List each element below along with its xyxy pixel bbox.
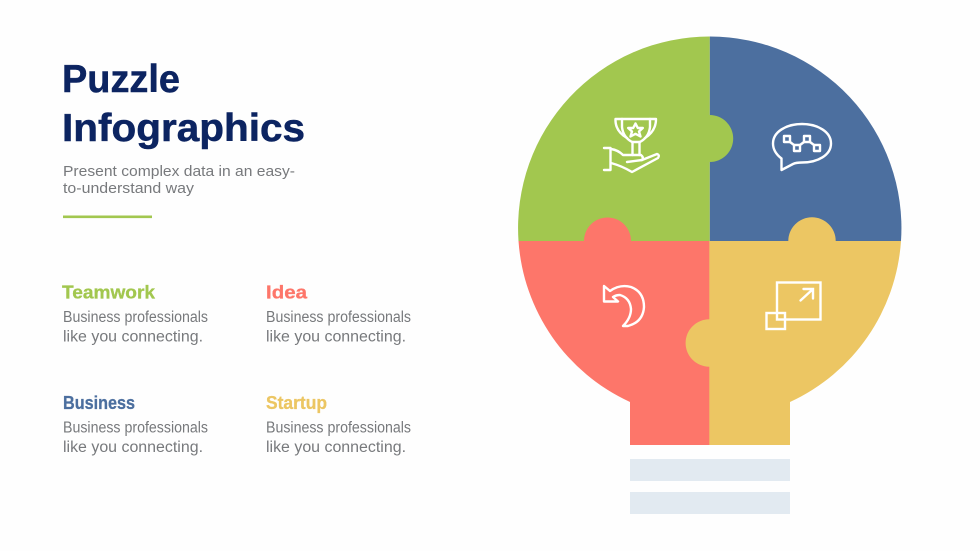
accent divider (63, 216, 152, 218)
puzzle piece: yellow, bottom right (686, 217, 901, 445)
text block: Startup: like you connecting. (266, 439, 406, 456)
subtitle: to-understand way (63, 180, 195, 197)
text block: Teamwork: Business professionals (63, 309, 208, 326)
text block: Startup (266, 392, 411, 456)
title (62, 58, 305, 150)
bulb base bar: top (630, 459, 790, 481)
subtitle (63, 163, 295, 197)
puzzle piece: blue, top right (710, 36, 901, 241)
icon: trophy on hand (604, 119, 659, 172)
subtitle: Present complex data in an easy- (63, 163, 295, 180)
text block: Idea: Business professionals (266, 309, 411, 326)
puzzle piece: red, bottom left (518, 217, 710, 445)
light bulb puzzle (518, 36, 901, 445)
text block: Teamwork: Teamwork (62, 282, 156, 302)
text block: Teamwork (62, 282, 208, 346)
bulb base bar: bottom (630, 492, 790, 514)
text block: Teamwork: like you connecting. (63, 328, 203, 346)
text block: Startup: Business professionals (266, 420, 411, 436)
text block: Startup: Startup (266, 392, 327, 413)
title: Puzzle (62, 58, 180, 101)
text block: Business (63, 392, 208, 456)
puzzle piece: green, top left (518, 36, 733, 241)
icon: speech bubble with zigzag (773, 124, 831, 170)
icon: resize squares (766, 282, 820, 329)
text block: Business: Business professionals (63, 420, 208, 436)
text block: Idea: like you connecting. (266, 328, 406, 346)
text block: Idea: Idea (266, 282, 308, 302)
title: Infographics (62, 107, 305, 150)
text block: Idea (266, 282, 411, 346)
icon: undo arrow (604, 286, 644, 326)
text block: Business: Business (63, 392, 135, 413)
text block: Business: like you connecting. (63, 439, 203, 456)
